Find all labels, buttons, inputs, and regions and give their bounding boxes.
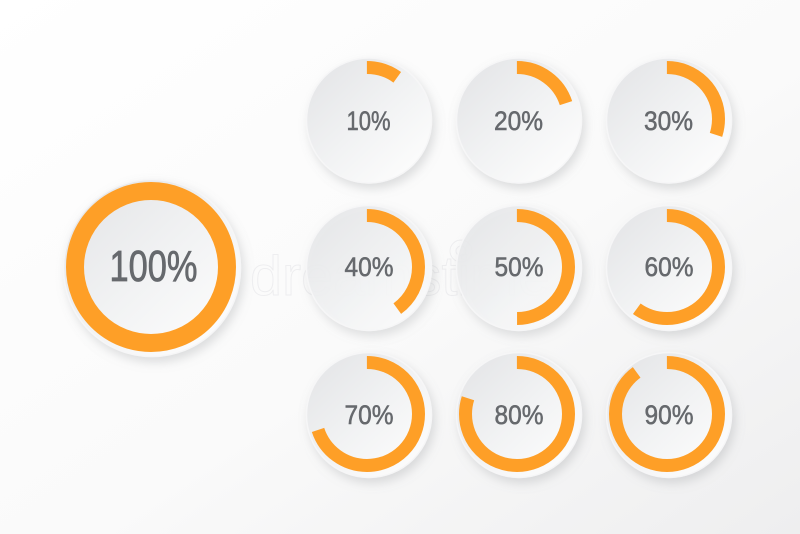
gauge: 100% [64, 180, 240, 356]
gauge: 90% [606, 352, 732, 478]
gauge: 40% [306, 206, 432, 330]
label: 100%: 100% [110, 242, 198, 291]
gauge: 30% [606, 58, 732, 183]
gauge: 10% [306, 58, 432, 183]
label: 30%: 30% [644, 106, 693, 136]
gauge: 50% [456, 206, 582, 330]
label: 20%: 20% [494, 106, 543, 136]
label: 70%: 70% [344, 400, 394, 430]
gauge: 70% [306, 352, 432, 478]
watermark: dreamstime [250, 244, 550, 307]
label: 50%: 50% [494, 252, 544, 282]
label: 40%: 40% [344, 252, 394, 282]
label: 10%: 10% [346, 106, 390, 136]
label: 90%: 90% [644, 400, 694, 430]
gauge: 80% [456, 352, 582, 478]
label: 60%: 60% [644, 252, 694, 282]
gauge: 20% [456, 58, 582, 183]
gauge: 60% [606, 206, 732, 330]
label: 80%: 80% [494, 400, 544, 430]
